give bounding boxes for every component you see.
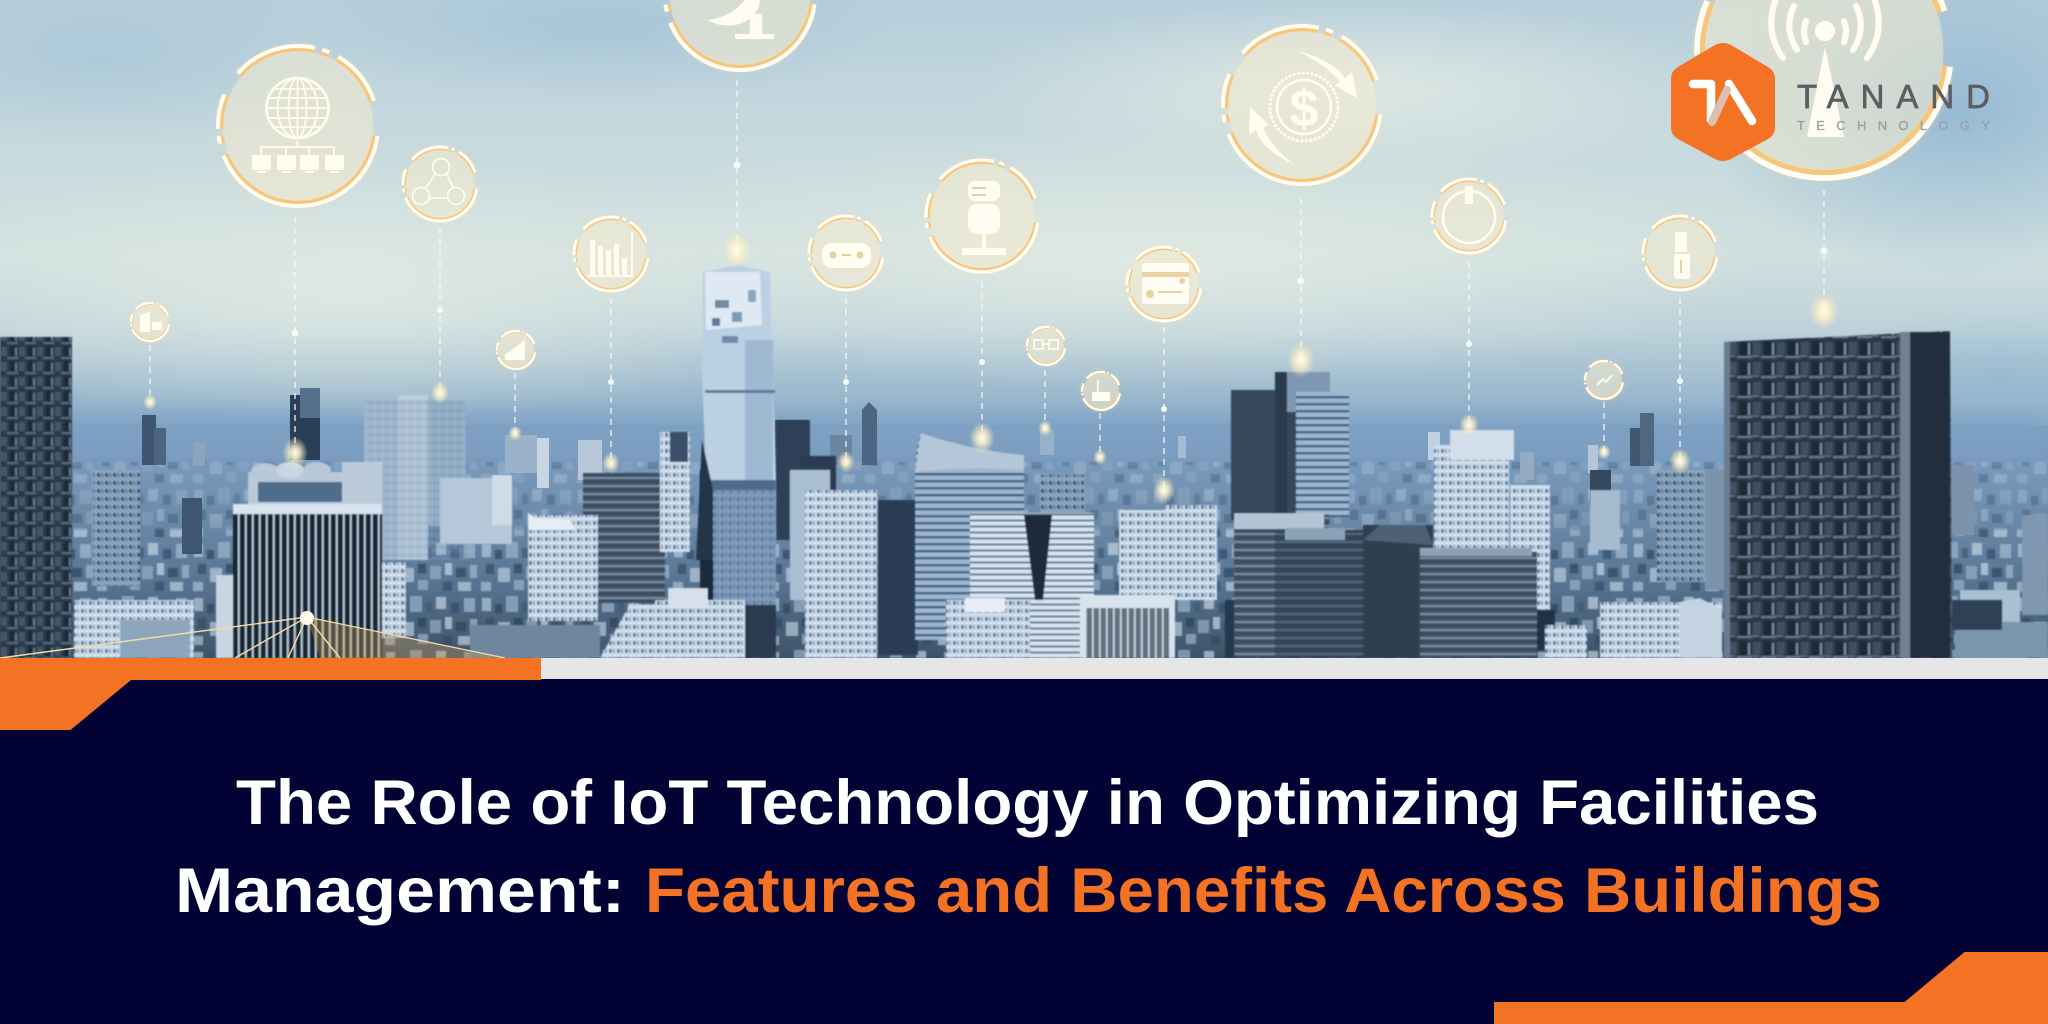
logo subtitle: TECHNOLOGY — [1797, 118, 1990, 133]
curved stripe building — [915, 433, 1024, 640]
icon: microphone — [926, 160, 1038, 272]
title line two white: Management: — [175, 856, 625, 926]
icon: small router — [1082, 372, 1120, 410]
icon: globe network — [218, 46, 378, 206]
icon: small gauge — [1585, 361, 1623, 399]
foreground buildings — [0, 265, 2048, 658]
icon: small glasses — [1027, 327, 1065, 365]
icon: wifi tower — [1697, 0, 1951, 178]
icon: dollar coin cycle: $ — [1290, 80, 1319, 138]
distant city — [0, 416, 2048, 658]
title line one: The Role of IoT Technology in Optimizing Facilities — [236, 768, 1819, 838]
distant towers — [142, 388, 1974, 554]
connector glow endpoints — [143, 232, 1839, 504]
rooftop tower — [233, 462, 382, 658]
icon: gamepad — [809, 216, 883, 290]
orange accent top-left — [0, 658, 541, 730]
title — [175, 768, 1882, 926]
dashed connector lines — [150, 80, 1824, 490]
main tall tower — [696, 265, 776, 658]
connector midpoints — [292, 162, 1828, 412]
dark stacked buildings — [1234, 513, 1537, 658]
panel: city skyline photo — [0, 0, 2048, 658]
logo: Tanand Technology — [1671, 43, 1990, 161]
icon: payment card — [1127, 247, 1201, 321]
orange accent bottom-right — [1494, 952, 2048, 1024]
logo hexagon mark — [1671, 43, 1775, 161]
divider bar grey — [541, 658, 2048, 679]
icon: dollar coin cycle — [1223, 26, 1381, 184]
icon: power button — [1432, 179, 1506, 253]
midground buildings — [92, 372, 2048, 658]
title line two orange: Features and Benefits Across Buildings — [645, 856, 1882, 926]
logo wordmark: TANAND — [1797, 78, 1990, 115]
network lines on rooftop — [0, 611, 505, 658]
icon: usb stick — [1643, 216, 1717, 290]
icon: small truck — [131, 303, 169, 341]
icon: small chart — [497, 331, 535, 369]
right dark tower — [1724, 331, 1952, 658]
icons layer — [131, 0, 1951, 410]
icon: connected nodes — [403, 147, 477, 221]
icon: satellite dish — [665, 0, 815, 70]
sky — [0, 0, 2048, 450]
icon: bar chart — [574, 217, 648, 291]
